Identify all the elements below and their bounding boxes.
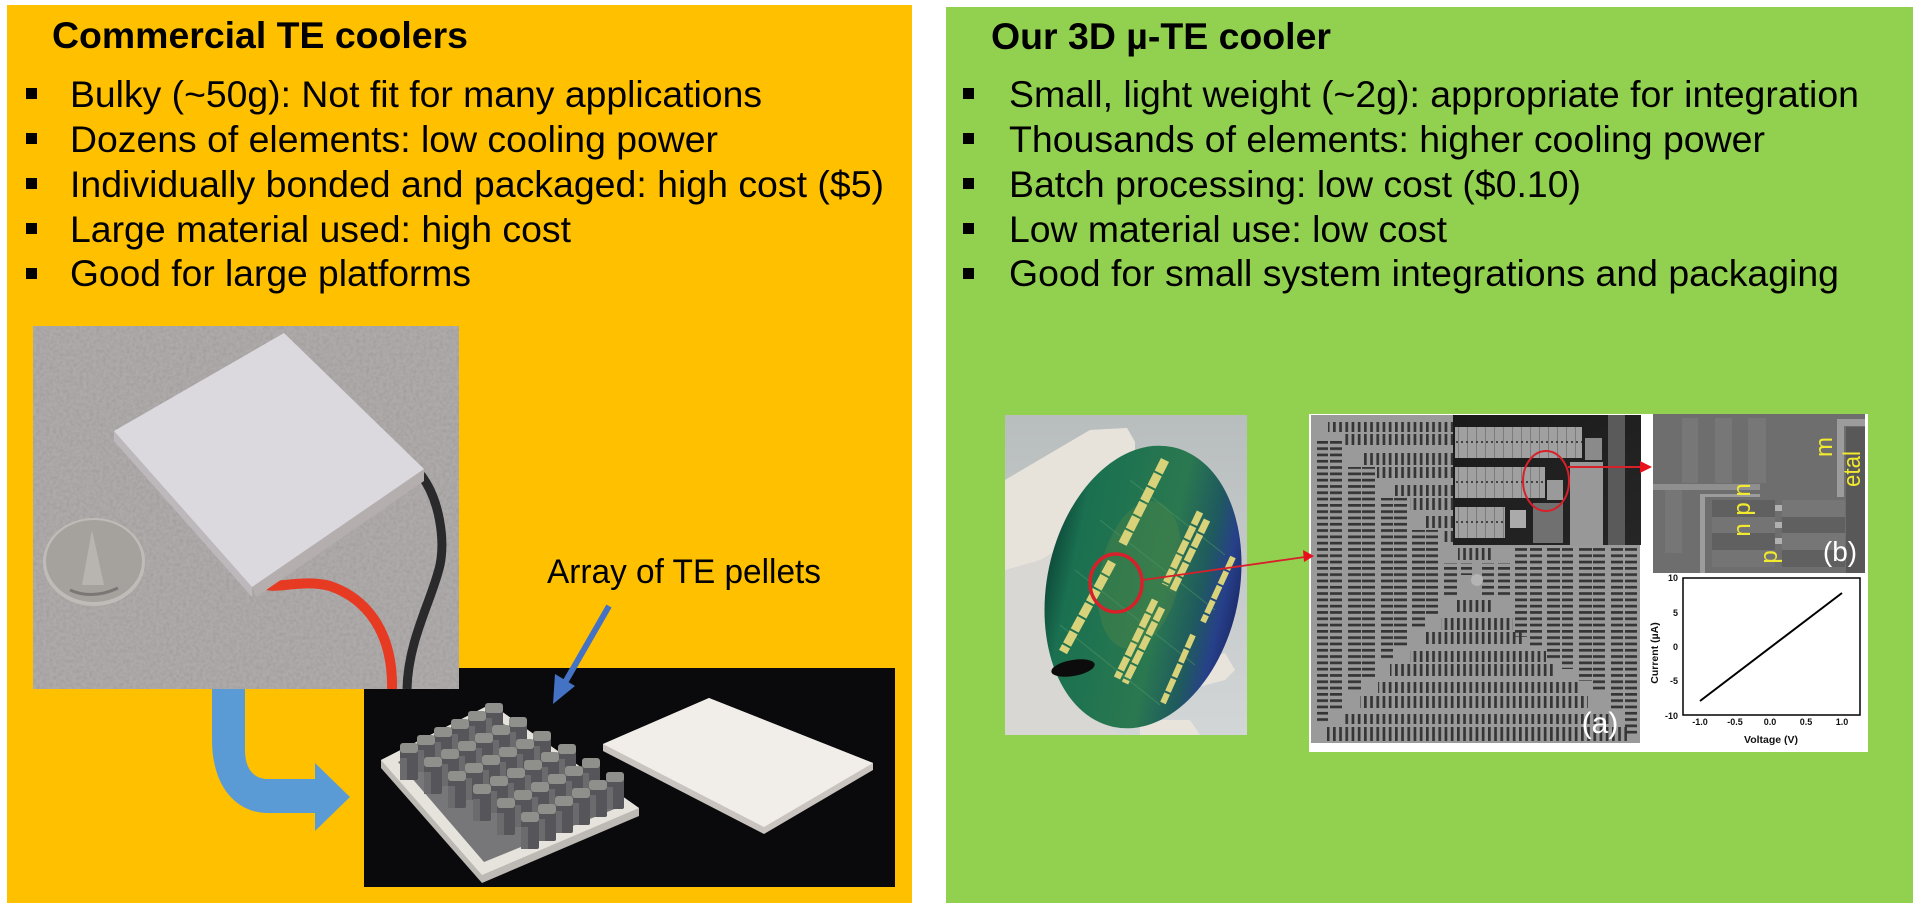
panel: commercial TE coolers <box>7 5 912 903</box>
element labels: n p n p metal: p <box>1729 502 1756 516</box>
x axis ticks: -0.5 <box>1727 717 1743 727</box>
arrow: pointer to pellets <box>553 606 609 704</box>
bullet list: micro cooler properties: Batch processing: low cost ($0.10) <box>1009 164 1581 205</box>
heading: our 3D micro-TE cooler: Our 3D µ-TE cooler <box>991 16 1331 57</box>
y axis ticks: 5 <box>1673 608 1678 618</box>
element labels: n p n p metal: p <box>1756 550 1783 564</box>
x axis ticks: 0.5 <box>1800 717 1812 727</box>
x axis ticks <box>1692 717 1848 727</box>
photo: opened cooler with pellet array <box>364 668 895 887</box>
arrow: inset to close-up <box>1568 461 1652 473</box>
x axis ticks: 1.0 <box>1836 717 1848 727</box>
bullet list: micro cooler properties <box>963 74 1859 294</box>
y axis ticks: 10 <box>1668 573 1678 583</box>
bullet list: commercial cooler properties: Large material used: high cost <box>70 209 572 250</box>
y axis ticks: 0 <box>1673 642 1678 652</box>
bullet list: micro cooler properties: Low material use: low cost <box>1009 209 1448 250</box>
highlight circle on wafer <box>1090 554 1142 612</box>
panel: our 3D micro-TE cooler <box>946 7 1913 903</box>
element labels: n p n p metal: m <box>1811 437 1838 457</box>
bullet list: commercial cooler properties: Dozens of elements: low cooling power <box>70 119 718 160</box>
y axis title: Current (µA) <box>1649 622 1661 684</box>
bullet list: micro cooler properties: Good for small system integrations and packaging <box>1009 253 1839 294</box>
highlight ellipse on inset <box>1523 451 1569 511</box>
label: array of TE pellets: Array of TE pellets <box>547 553 821 591</box>
IV line <box>1700 593 1842 701</box>
micrograph (a): SEM of cooler array <box>1311 415 1640 743</box>
photo: packaged cooler with coin and wires <box>33 326 459 689</box>
element labels: n p n p metal: n <box>1729 483 1756 497</box>
x axis ticks: 0.0 <box>1764 717 1776 727</box>
bullet list: commercial cooler properties: Individually bonded and packaged: high cost ($5) <box>70 164 884 205</box>
arrow: bent block arrow from cooler to pellet array <box>212 689 350 831</box>
label (a): (a) <box>1582 707 1618 740</box>
wafer <box>1019 427 1267 747</box>
y axis ticks <box>1665 573 1678 721</box>
arrow: wafer to micrograph <box>1143 550 1314 580</box>
x axis title: Voltage (V) <box>1744 734 1798 746</box>
y axis ticks: -5 <box>1670 676 1678 686</box>
y axis ticks: -10 <box>1665 711 1678 721</box>
chart: current vs voltage <box>1649 573 1860 746</box>
element labels: n p n p metal <box>1729 437 1866 564</box>
bullet list: commercial cooler properties: Bulky (~50g): Not fit for many applications <box>70 74 762 115</box>
white figure backing <box>1309 414 1868 752</box>
bullet list: micro cooler properties: Thousands of elements: higher cooling power <box>1009 119 1765 160</box>
element labels: n p n p metal: etal <box>1839 451 1866 487</box>
bullet list: micro cooler properties: Small, light weight (~2g): appropriate for integration <box>1009 74 1859 115</box>
element labels: n p n p metal: n <box>1729 523 1756 537</box>
bullet list: commercial cooler properties: Good for large platforms <box>70 253 471 294</box>
micrograph inset: tilted SEM close-up <box>1453 415 1641 545</box>
photo: gloved hand holding wafer <box>1005 415 1267 747</box>
x axis ticks: -1.0 <box>1692 717 1708 727</box>
bullet list: commercial cooler properties <box>26 74 884 294</box>
micrograph (b): p-n elements close-up <box>1653 414 1866 573</box>
heading: commercial TE coolers: Commercial TE coolers <box>52 15 468 56</box>
label (b): (b) <box>1823 536 1857 567</box>
